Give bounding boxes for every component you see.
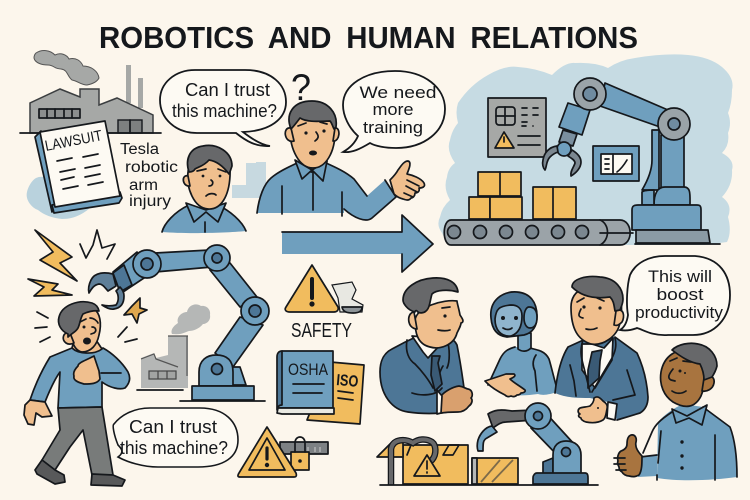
scene: glass box — [472, 458, 518, 484]
text: Tesla robotic arm injury: robotic — [125, 159, 178, 176]
control panel — [488, 98, 546, 157]
icon: impact star — [124, 298, 147, 323]
icon: warning with lock — [238, 427, 328, 477]
speech bubble: this will boost productivity — [620, 256, 730, 335]
monitor — [593, 146, 639, 181]
icon: ISO document — [307, 362, 364, 424]
speech bubble: can I trust: Can I trust — [185, 80, 270, 100]
speech bubble: we need more training — [343, 71, 445, 152]
speech bubble: this will boost productivity: This will — [648, 267, 712, 286]
person: man with open hand — [257, 101, 425, 220]
person: businessman left — [380, 278, 472, 414]
speech bubble: can I trust — [160, 70, 286, 146]
icon: lawsuit book — [27, 121, 122, 219]
speech bubble: can I trust lower: this machine? — [120, 438, 228, 458]
speech bubble: can I trust: this machine? — [172, 101, 277, 121]
icon: OSHA book — [277, 351, 334, 414]
icon: safety warning and scale — [285, 265, 363, 313]
icon: lawsuit book: LAWSUIT — [44, 127, 104, 155]
person: man giving thumbs up — [614, 343, 737, 480]
person: injured man — [24, 302, 137, 486]
icon: OSHA book: OSHA — [288, 360, 329, 379]
person: businessman right — [555, 276, 648, 423]
conveyor belt — [444, 220, 633, 245]
speech bubble: can I trust lower — [113, 408, 238, 467]
background wash — [438, 54, 733, 245]
speech bubble: can I trust lower: Can I trust — [129, 417, 217, 437]
speech bubble: we need more training: We need — [360, 83, 436, 102]
title: ROBOTICS AND HUMAN RELATIONS — [99, 20, 638, 55]
text: Tesla robotic arm injury: arm — [129, 177, 158, 194]
arrow — [282, 215, 433, 272]
robot arm — [543, 78, 720, 244]
icon: lightning bolts — [28, 230, 115, 296]
text: Tesla robotic arm injury: injury — [129, 193, 171, 210]
text: Tesla robotic arm injury: Tesla — [120, 141, 159, 158]
icon: ISO document: ISO — [336, 372, 359, 391]
icon: open hand — [390, 161, 425, 200]
scene: yellow box with warning — [377, 439, 468, 485]
ground line — [380, 484, 598, 486]
scene: small robot arm — [477, 403, 588, 484]
speech bubble: we need more training: training — [363, 118, 423, 137]
icon: question mark: ? — [291, 67, 311, 108]
speech bubble: this will boost productivity: boost — [656, 285, 704, 304]
person: worried man small — [162, 145, 266, 233]
icon: factory with smoke — [20, 51, 161, 133]
panel: robot assembly line — [438, 54, 733, 245]
arrow outline — [282, 215, 433, 272]
icon: small factory with smoke — [137, 304, 210, 390]
text: SAFETY: SAFETY — [291, 320, 352, 342]
robot humanoid — [485, 292, 558, 397]
speech bubble: this will boost productivity: productivity — [635, 303, 724, 322]
yellow boxes — [469, 172, 576, 219]
text: Tesla robotic arm injury — [120, 141, 178, 210]
speech bubble: we need more training: more — [372, 100, 414, 119]
robot arm: striking — [89, 245, 269, 401]
